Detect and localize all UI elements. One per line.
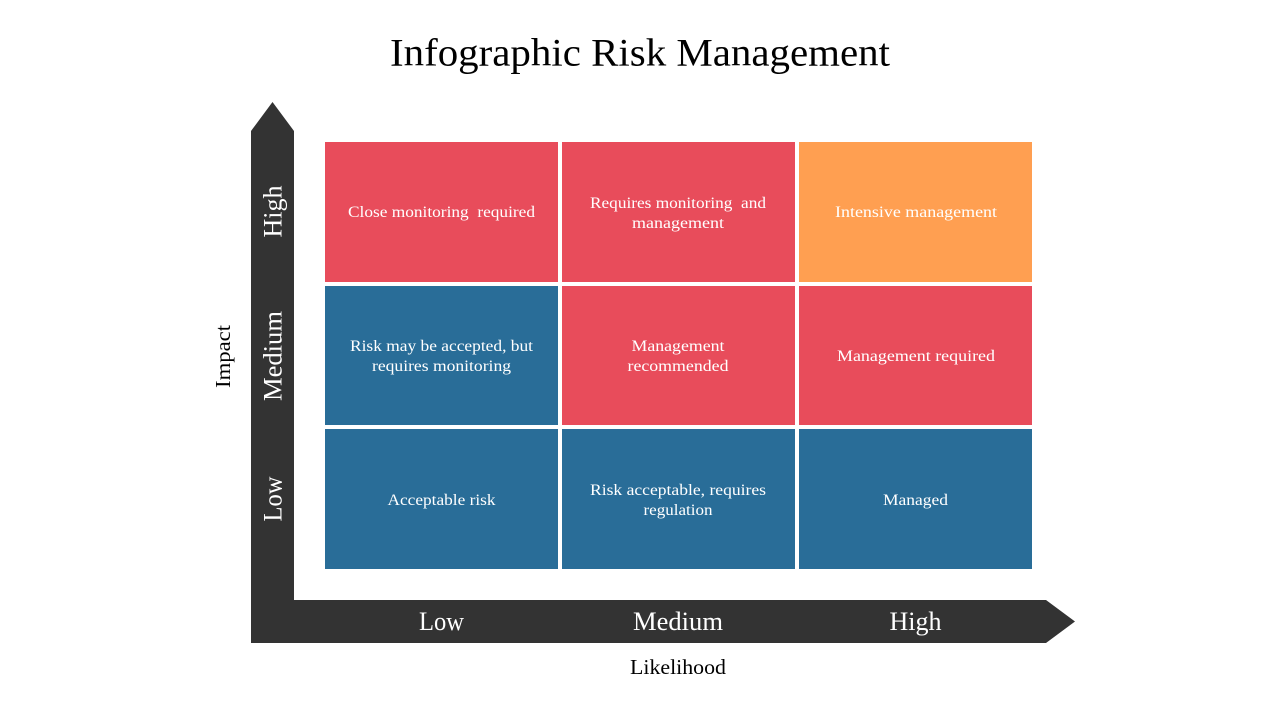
cell: high impact, high likelihood <box>799 142 1032 282</box>
vertical axis levels <box>258 186 288 522</box>
cell: low impact, high likelihood <box>799 429 1032 569</box>
axis label: low impact: Low <box>258 476 288 522</box>
axes arrow <box>251 102 1075 643</box>
cell: high impact, medium likelihood: Requires monitoring and <box>590 195 766 212</box>
axis label: high likelihood: High <box>890 607 942 636</box>
x axis title: Likelihood <box>630 655 727 679</box>
cell: low impact, low likelihood <box>325 429 558 569</box>
cell: low impact, medium likelihood: regulation <box>644 502 712 519</box>
risk matrix <box>325 142 1032 569</box>
cell: low impact, medium likelihood <box>562 429 795 569</box>
cell: high impact, high likelihood: Intensive management <box>835 204 998 221</box>
cell: high impact, low likelihood: Close monitoring required <box>348 204 535 221</box>
cell: high impact, low likelihood <box>325 142 558 282</box>
axis label: low likelihood: Low <box>419 607 464 636</box>
y axis title: Impact <box>211 325 235 388</box>
horizontal axis levels <box>419 607 942 636</box>
axis label: medium impact: Medium <box>258 311 288 401</box>
cell: medium impact, medium likelihood <box>562 286 795 425</box>
cell: high impact, medium likelihood: management <box>632 215 725 232</box>
cell: medium impact, medium likelihood: recommended <box>628 358 728 375</box>
cell: medium impact, high likelihood: Management required <box>837 348 995 365</box>
axis label: high impact: High <box>258 186 288 238</box>
cell: medium impact, high likelihood <box>799 286 1032 425</box>
cell: medium impact, low likelihood: Risk may be accepted, but <box>350 338 534 355</box>
cell: high impact, medium likelihood <box>562 142 795 282</box>
cell: medium impact, low likelihood: requires monitoring <box>372 358 511 375</box>
cell: low impact, high likelihood: Managed <box>883 492 948 509</box>
cell: medium impact, low likelihood <box>325 286 558 425</box>
axis label: medium likelihood: Medium <box>633 607 723 636</box>
cell: low impact, low likelihood: Acceptable risk <box>388 492 496 509</box>
cell: low impact, medium likelihood: Risk acceptable, requires <box>590 482 766 499</box>
cell: medium impact, medium likelihood: Management <box>632 338 725 355</box>
title: Infographic Risk Management <box>390 32 890 74</box>
